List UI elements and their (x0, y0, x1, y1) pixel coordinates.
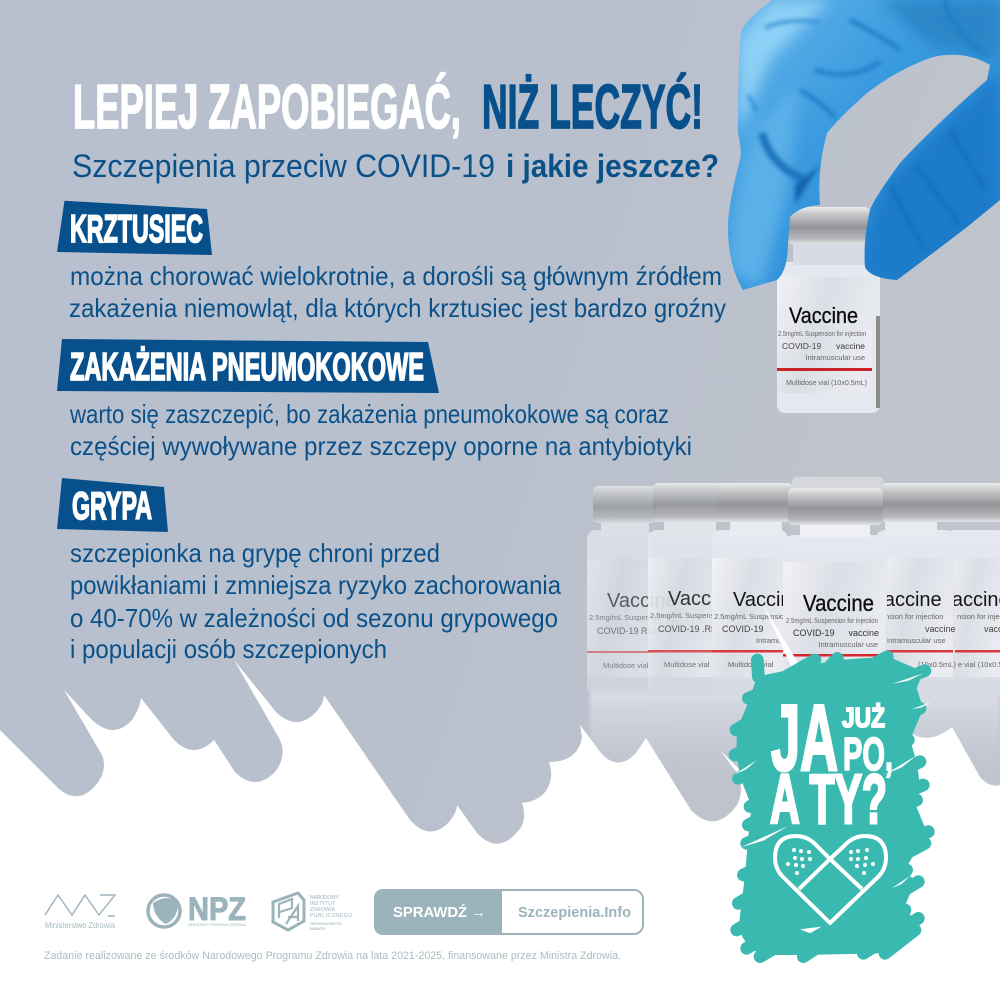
photo: gloved hand holding vial (728, 0, 1000, 413)
button: sprawdź szczepienia.info (374, 889, 643, 935)
held vial: 2.5mg/mL Suspension for injection (778, 329, 866, 338)
text: zakażenia pneumokokowe: częściej wywoływane przez szczepy oporne na antybiotyki (70, 431, 692, 461)
text: krztusiec: zakażenia niemowląt, dla których krztusiec jest bardzo groźny (69, 293, 726, 323)
title: white part: LEPIEJ ZAPOBIEGAĆ, (73, 73, 461, 142)
section: grypa (57, 478, 561, 664)
vial 3 (712, 483, 803, 695)
vial 1: Vaccine (607, 590, 677, 612)
heading: zakażenia pneumokokowe: ZAKAŻENIA PNEUMOKOKOWE (70, 346, 424, 389)
logo: Narodowy Instytut Zdrowia Publicznego: ZDROWIA (310, 907, 336, 913)
vial 5: Vaccine (872, 589, 942, 611)
vial 2: Vaccine (668, 588, 738, 610)
photo: row of vaccine vials (587, 477, 1000, 792)
logo: Ministerstwo Zdrowia (45, 895, 115, 930)
logo: NPZ: NPZ (188, 891, 246, 927)
badge: ja już po, a ty? (733, 657, 932, 957)
heading: krztusiec (57, 201, 212, 255)
button: sprawdź szczepienia.info: Szczepienia.Info (518, 905, 631, 921)
vial 6 (940, 483, 1000, 695)
vial centre: vaccine (848, 628, 879, 638)
white torn paint edge (0, 603, 1000, 1000)
logo: NPZ: NARODOWY PROGRAM ZDROWIA (188, 922, 246, 927)
text: krztusiec (69, 261, 726, 323)
vial centre: COVID-19 (793, 628, 835, 638)
vial 1 (587, 486, 677, 695)
text: grypa: szczepionka na grypę chroni przed (70, 538, 440, 568)
logo: NPZ (148, 891, 246, 927)
vial 2: Multidose vial (664, 660, 710, 669)
vial centre: Intramuscular use (818, 640, 878, 649)
vial 1: COVID-19 RNA (597, 626, 660, 636)
heading: zakażenia pneumokokowe (57, 339, 439, 393)
logo: Narodowy Instytut Zdrowia Publicznego: PAŃSTWOWY INSTYTUT (310, 922, 343, 926)
section: zakażenia pneumokokowe (57, 339, 692, 461)
text: zakażenia pneumokokowe: warto się zaszczepić, bo zakażenia pneumokokowe są coraz (69, 399, 669, 429)
vial 2: COVID-19 .RN (658, 624, 718, 634)
reflection under vials (590, 692, 1000, 792)
button: sprawdź szczepienia.info: SPRAWDŹ → (393, 904, 486, 921)
text: grypa: powikłaniami i zmniejsza ryzyko zachorowania (70, 570, 561, 600)
icon: heart made of plasters (775, 836, 886, 923)
vial 3: COVID-19 (722, 624, 764, 634)
held vial: Intramuscular use (805, 353, 865, 362)
glove (728, 0, 1000, 290)
logo: Narodowy Instytut Zdrowia Publicznego: INSTYTUT (310, 901, 335, 907)
subtitle (72, 148, 719, 184)
held vial: COVID-19 (782, 341, 821, 351)
footnote: Zadanie realizowane ze środków Narodowego Programu Zdrowia na lata 2021-2025, finansowane przez Ministra Zdrowia. (44, 950, 621, 962)
vial 3: Multidose vial (728, 660, 774, 669)
vial 1: 2.5mg/mL Suspension (589, 613, 663, 622)
heading: krztusiec: KRZTUSIEC (70, 208, 203, 251)
text: grypa: i populacji osób szczepionych (70, 634, 387, 664)
vial 2: 2.5mg/mL Suspension (650, 611, 724, 620)
vial 3: Vaccine (733, 589, 803, 611)
vial 1: Multidose vial (603, 661, 649, 670)
logo: Narodowy Instytut Zdrowia Publicznego: BADAWCZY (310, 927, 327, 931)
logo: Narodowy Instytut Zdrowia Publicznego: PUBLICZNEGO (310, 913, 352, 919)
subtitle: Szczepienia przeciw COVID-19 (72, 148, 495, 184)
vial 5: (10x0.5mL) (918, 660, 956, 669)
vial centre (783, 488, 887, 700)
text: zakażenia pneumokokowe (69, 399, 692, 461)
vial centre: 2.5mg/mL Suspension for injection (786, 616, 878, 625)
logo: Narodowy Instytut Zdrowia Publicznego (273, 893, 352, 931)
vial 5: nsion for injection (885, 612, 943, 621)
text: grypa: o 40-70% w zależności od sezonu grypowego (70, 603, 558, 633)
held vial (777, 207, 880, 413)
title (73, 73, 703, 142)
heading: grypa: GRYPA (72, 485, 152, 528)
vial back cap (792, 477, 884, 489)
section: krztusiec (57, 201, 726, 323)
logo: Ministerstwo Zdrowia: Ministerstwo Zdrowia (45, 921, 115, 930)
vial 3: Intramuscular (756, 636, 802, 645)
vial 3: 2.5mg/mL Suspension for (714, 612, 800, 621)
heading: grypa (57, 478, 168, 532)
badge: A TY?: A TY? (770, 760, 887, 838)
badge: PO,: PO, (843, 728, 893, 780)
held vial: vaccine (836, 341, 865, 351)
vial centre: Vaccine (803, 590, 874, 616)
vial 5: Intramuscular use (886, 636, 946, 645)
title: blue part: NIŻ LECZYĆ! (482, 73, 703, 142)
badge: JA: JA (771, 685, 838, 790)
text: grypa (70, 538, 561, 664)
logo: Narodowy Instytut Zdrowia Publicznego: NARODOWY (310, 895, 340, 901)
text: krztusiec: można chorować wielokrotnie, a dorośli są głównym źródłem (70, 261, 722, 291)
subtitle: i jakie jeszcze? (506, 148, 719, 184)
vial 5 (872, 483, 956, 695)
badge: JUŻ: JUŻ (842, 702, 885, 733)
vial 5: vaccine (925, 624, 956, 634)
vial 2 (648, 483, 738, 695)
badge: scribble shape (733, 657, 932, 957)
held vial: Vaccine (789, 303, 858, 328)
held vial: Multidose vial (10x0.5mL) (786, 378, 867, 387)
